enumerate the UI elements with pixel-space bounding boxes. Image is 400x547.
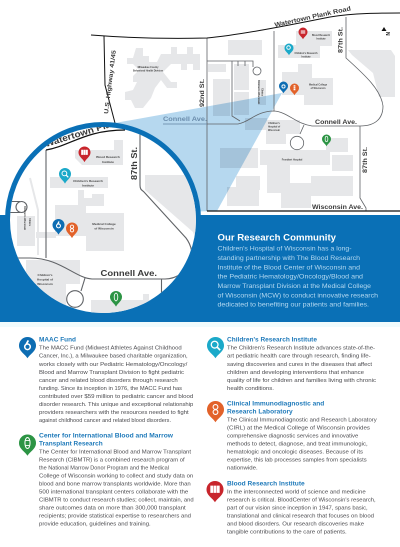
panel: Children's Research Institute bbox=[207, 336, 376, 392]
MAAC body text: funding. Since its inception in 1976, the MACC Fund has bbox=[39, 386, 182, 392]
Blood Research body text: part of our vision since inception in 1947, spans basic, bbox=[227, 506, 368, 512]
icon: magnifier pin bbox=[207, 337, 224, 358]
community body: Institute of the Blood Center of Wisconsin and bbox=[218, 264, 361, 271]
heading: Clinical lab: Research Laboratory bbox=[227, 409, 293, 416]
building labels: of Wisconsin bbox=[311, 87, 326, 90]
building labels: Behavioral Health Division bbox=[133, 70, 164, 72]
primary black roads bbox=[91, 13, 400, 211]
CIBMTR body text: share outcomes data on more than 300,000 transplant bbox=[39, 506, 186, 512]
Clinical lab body text: (CIRL) at the Medical College of Wisconsin provides bbox=[227, 426, 370, 432]
Blood Research body text: and blood disorders. Our research discoveries make bbox=[227, 522, 364, 528]
Blood Research body text bbox=[227, 490, 376, 536]
building labels: Institute bbox=[301, 56, 311, 58]
inset building labels bbox=[23, 155, 120, 286]
panel: Clinical Immunodiagnostic and Research Laboratory bbox=[207, 401, 377, 472]
inset building labels: Medical College bbox=[92, 222, 116, 226]
Clinical lab body text: hematologic and oncologic diseases. Because of its bbox=[227, 450, 363, 456]
inset building labels: Blood Research bbox=[96, 155, 120, 159]
Children's Research body text bbox=[227, 346, 376, 392]
inset pin: orange bbox=[66, 222, 78, 238]
heading: CIBMTR bbox=[39, 432, 173, 448]
panel: Blood Research Institute bbox=[206, 480, 376, 536]
Blood Research body text: translational and clinical research that focuses on blood bbox=[227, 514, 374, 520]
building labels: Children's Research bbox=[294, 52, 318, 55]
Blood Research body text: In the interconnected world of science and medicine bbox=[227, 490, 366, 496]
CIBMTR body text bbox=[39, 450, 194, 528]
north arrow: N bbox=[384, 32, 390, 36]
heading: MAAC Fund: MAAC Fund bbox=[39, 336, 76, 344]
Blood Research body text: research is critical. BloodCenter of Wisconsin's research, bbox=[227, 498, 376, 504]
MAAC body text: cancer and related blood disorders through research bbox=[39, 378, 178, 384]
north arrow bbox=[382, 27, 390, 36]
inset pin: red bbox=[78, 146, 90, 162]
Children's Research body text: children and developing interventions that enhance bbox=[227, 370, 364, 376]
MAAC body text: against childhood cancer and related blood disorders. bbox=[39, 418, 171, 424]
heading: Blood Research Institute: Blood Research Institute bbox=[227, 480, 305, 487]
inset white disc with ring bbox=[8, 124, 198, 316]
road labels bbox=[104, 5, 369, 211]
map pin: green bbox=[322, 134, 331, 146]
CIBMTR body text: the National Marrow Donor Program and the Medical bbox=[39, 466, 169, 472]
MAAC body text: disorder research. This unique and exceptional relationship bbox=[39, 402, 193, 408]
road labels: U.S. Highway 41/45 bbox=[104, 49, 118, 114]
inset buildings bbox=[17, 140, 205, 320]
inset Connell label: Connell Ave. bbox=[100, 268, 157, 278]
road labels: 92nd St. bbox=[199, 79, 206, 107]
community body: dedicated to benefiting our patients and families. bbox=[218, 302, 369, 309]
inset pin: cyan bbox=[59, 168, 71, 184]
map pin: blue bbox=[279, 82, 288, 93]
community body: Marrow Transplant Division at the Medical College bbox=[218, 283, 372, 290]
Children's Research body text: quality of life for children and families living with chronic bbox=[227, 378, 376, 384]
Our Research Community text block bbox=[218, 232, 379, 309]
MAAC body text bbox=[38, 346, 193, 424]
community body bbox=[218, 246, 379, 309]
building labels bbox=[133, 34, 331, 162]
Clinical lab body text: methods to detect, diagnose, and treat immunologic, bbox=[227, 442, 368, 448]
building labels: Medical College bbox=[309, 84, 328, 86]
Clinical lab body text: nationwide. bbox=[227, 466, 258, 472]
building labels: Children's bbox=[268, 122, 280, 125]
Connell Ave left road rule bbox=[163, 123, 207, 125]
heading: CIBMTR: Center for International Blood and Marrow bbox=[39, 432, 173, 440]
MAAC body text: Blood and Marrow Transplant Division to fight pediatric bbox=[39, 370, 184, 376]
Children's Research body text: saving discoveries and cures in the diseases that affect bbox=[227, 362, 372, 368]
CIBMTR body text: provide education, guidelines and training. bbox=[39, 522, 151, 528]
blue research community band bbox=[0, 215, 400, 322]
community heading: Our Research Community bbox=[218, 232, 336, 242]
pale band edge bbox=[0, 322, 400, 327]
heading: CIBMTR: Transplant Research bbox=[39, 441, 103, 448]
icon: red pin bbox=[206, 481, 224, 502]
road labels: Connell Ave. bbox=[315, 119, 357, 126]
building labels: Clinics bbox=[260, 88, 264, 97]
Children's Research body text: The Children's Research Institute advances state-of-the- bbox=[227, 346, 375, 352]
inset map contents bbox=[10, 127, 196, 313]
map pin: cyan bbox=[284, 44, 294, 55]
heading: Clinical lab: Clinical Immunodiagnostic and bbox=[227, 401, 324, 408]
light blue zoom wedge bbox=[60, 93, 282, 215]
inset building labels: Children's Wisconsin bbox=[23, 206, 26, 231]
inset building labels: Clinics bbox=[28, 218, 31, 227]
CIBMTR body text: College of Wisconsin working to collect and study data on bbox=[39, 474, 193, 480]
inset building labels: Institute bbox=[102, 160, 114, 164]
Clinical lab body text: The Clinical Immunodiagnostic and Research Laboratory bbox=[227, 418, 377, 424]
building labels: Froedtert Hospital bbox=[282, 158, 303, 162]
CIBMTR body text: The Center for International Blood and Marrow Transplant bbox=[39, 450, 191, 456]
road labels: Watertown Plank Road bbox=[274, 5, 352, 29]
Clinical lab body text: expertise, this lab processes samples from specialists bbox=[227, 458, 367, 464]
building labels: Hospital of bbox=[268, 126, 280, 128]
community body: standing partnership with The Blood Research bbox=[218, 255, 361, 262]
Clinical lab body text bbox=[227, 418, 377, 472]
CIBMTR body text: blood and bone marrow transplants worldwide. More than bbox=[39, 482, 191, 488]
building labels: Institute bbox=[316, 38, 326, 40]
inset building labels: Hospital of bbox=[37, 278, 54, 282]
community body: Children's Hospital of Wisconsin has a long- bbox=[218, 246, 352, 253]
panel: Center for International Blood and Marrow Transplant Research bbox=[19, 432, 194, 528]
inset building labels: Children's bbox=[37, 273, 53, 277]
road labels: Wisconsin Ave. bbox=[312, 204, 363, 211]
heading: Children's Research Institute: Children's Research Institute bbox=[227, 336, 318, 344]
icon: CIBMTR pin bbox=[19, 434, 36, 456]
road labels: 87th St. bbox=[338, 27, 344, 53]
inset pin: green bbox=[110, 291, 122, 307]
CIBMTR body text: 500 international transplant centers collaborate with the bbox=[39, 490, 188, 496]
heading: Clinical lab bbox=[227, 401, 324, 416]
inset magnifier circle bbox=[5, 122, 201, 313]
inset 87th St label: 87th St. bbox=[129, 147, 139, 180]
Clinical lab body text: comprehensive diagnostic services and innovative bbox=[227, 434, 358, 440]
inset pin: blue bbox=[52, 219, 64, 235]
building labels: Children's Wisconsin bbox=[257, 80, 260, 105]
CIBMTR body text: CIBMTR to conduct research studies; collect, maintain, and bbox=[39, 498, 194, 504]
community body: of Wisconsin (MCW) to conduct innovative research bbox=[218, 292, 379, 299]
MAAC body text: works closely with our Pediatric Hematology/Oncology/ bbox=[38, 362, 188, 368]
Blood Research body text: tangible contributions to the care of patients. bbox=[227, 530, 347, 536]
road labels: 87th St. bbox=[362, 147, 369, 173]
inset building labels: Wisconsin bbox=[37, 282, 53, 286]
CIBMTR body text: Research (CIBMTR) is a combined research program of bbox=[39, 458, 185, 464]
inset roads bbox=[10, 134, 192, 308]
icon: MAAC Fund pin bbox=[19, 337, 36, 358]
building labels: Wisconsin bbox=[268, 129, 281, 132]
Children's Research body text: art pediatric health care through research, finding life- bbox=[227, 354, 371, 360]
community body: the Pediatric Hematology/Oncology/Blood and bbox=[218, 274, 364, 281]
inset building labels: of Wisconsin bbox=[94, 226, 114, 230]
MAAC body text: The MACC Fund (Midwest Athletes Against Childhood bbox=[39, 346, 182, 352]
road labels: Connell Ave. bbox=[163, 116, 207, 123]
MAAC body text: Cancer, Inc.), a Milwaukee based charitable organization, bbox=[39, 354, 188, 360]
map pin: red bbox=[298, 28, 308, 39]
building labels: Milwaukee County bbox=[138, 66, 159, 69]
MAAC body text: providers researchers with the resources needed to fight bbox=[39, 410, 189, 416]
Watertown label inset: Watertown Plank bbox=[44, 116, 124, 149]
secondary roads bbox=[207, 17, 383, 211]
map buildings bbox=[125, 31, 395, 208]
building labels: Blood Research bbox=[312, 34, 331, 37]
Children's Research body text: health conditions. bbox=[227, 386, 274, 392]
MAAC body text: contributed over $59 million to pediatric cancer and blood bbox=[39, 394, 193, 400]
inset building labels: Institute bbox=[82, 184, 94, 188]
icon: orange pin bbox=[207, 401, 224, 422]
CIBMTR body text: recipients; provide statistical expertise to researchers and bbox=[39, 514, 191, 520]
map pin: orange bbox=[290, 84, 299, 95]
inset building labels: Children's Research bbox=[73, 179, 103, 183]
Watertown road inset bbox=[46, 130, 125, 150]
panel: MAAC Fund bbox=[19, 336, 193, 424]
main campus map bbox=[60, 5, 400, 215]
